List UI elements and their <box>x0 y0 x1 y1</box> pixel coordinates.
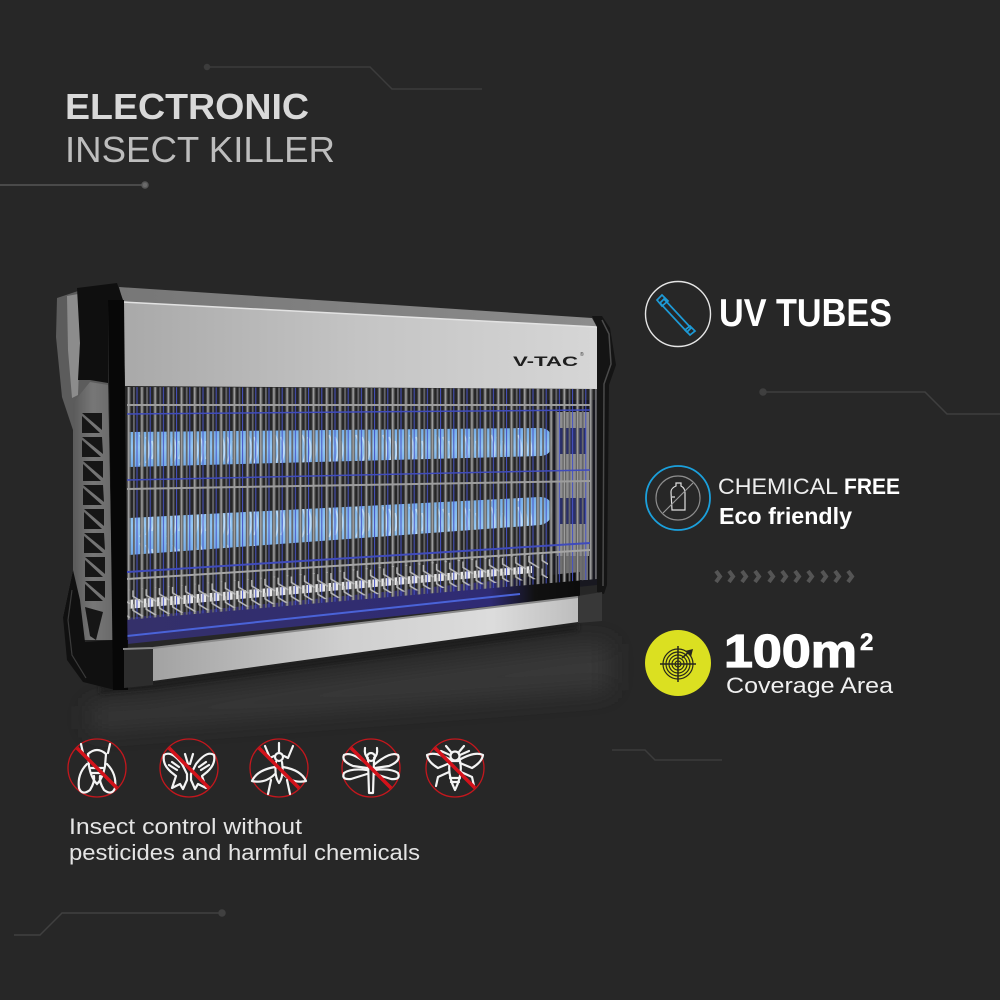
icon: no wasp <box>426 739 484 797</box>
eco friendly text: Eco friendly <box>719 503 852 529</box>
wire rails <box>127 405 590 579</box>
superscript 2: 2 <box>860 629 873 656</box>
housing grey body <box>56 291 113 640</box>
chevron divider <box>716 571 852 582</box>
title <box>65 86 335 170</box>
icon: no mosquito <box>250 739 308 797</box>
bottom panel <box>153 597 578 681</box>
top panel highlight <box>123 302 597 327</box>
icon: target <box>645 630 711 696</box>
caption line 2: pesticides and harmful chemicals <box>69 840 420 865</box>
cage interior <box>125 387 597 642</box>
bottom panel top edge <box>123 597 578 649</box>
decorative circuit line: bottom left <box>14 910 225 935</box>
housing base highlight <box>68 590 86 678</box>
title line 2: INSECT KILLER <box>65 129 335 170</box>
insect icons row <box>68 739 484 797</box>
left foot <box>124 650 153 688</box>
right side post <box>592 316 616 594</box>
left housing <box>56 283 128 690</box>
V-TAC logo: ® <box>580 351 584 358</box>
purple light band <box>127 572 580 644</box>
feature: chemical free <box>646 466 900 530</box>
title line 1: ELECTRONIC <box>65 86 309 127</box>
top strip <box>119 287 597 327</box>
decorative circuit line: middle <box>612 750 722 760</box>
right post highlight <box>602 320 611 586</box>
right foot <box>578 592 602 623</box>
wire grid <box>125 387 597 627</box>
caption <box>69 814 420 865</box>
UV tube upper <box>129 428 552 467</box>
feature: coverage <box>645 625 894 698</box>
icon: no dragonfly <box>342 739 400 797</box>
decorative circuit line: top <box>204 64 482 89</box>
icon: no cicada <box>68 739 126 797</box>
housing black cap <box>77 283 123 383</box>
free text: FREE <box>844 474 900 499</box>
icon: no chemical bottle <box>646 466 710 530</box>
V-TAC logo <box>513 351 584 369</box>
feature: UV tubes <box>646 282 892 346</box>
product reflection <box>90 627 610 730</box>
right compartment <box>548 400 597 590</box>
vent slots <box>82 413 105 640</box>
white reflector bar <box>127 566 532 609</box>
V-TAC logo: V-TAC <box>513 353 578 369</box>
vent column <box>73 382 113 640</box>
UV tubes label: UV TUBES <box>719 292 892 335</box>
chemical free text: CHEMICAL <box>718 474 838 499</box>
housing light strip <box>67 294 80 398</box>
housing black base <box>63 570 128 690</box>
coverage area text: Coverage Area <box>726 673 894 698</box>
top panel <box>123 302 597 389</box>
decorative circuit line: right <box>760 389 1000 414</box>
black inner post <box>108 300 128 690</box>
100m2 value: 100m <box>724 625 857 677</box>
blue light streak <box>127 594 520 636</box>
icon: no butterfly <box>160 739 218 797</box>
caption line 1: Insect control without <box>69 814 302 839</box>
icon: UV tube <box>646 282 710 346</box>
decorative circuit line: title <box>0 182 148 188</box>
UV tube lower <box>129 497 552 555</box>
product: insect killer <box>56 283 616 690</box>
